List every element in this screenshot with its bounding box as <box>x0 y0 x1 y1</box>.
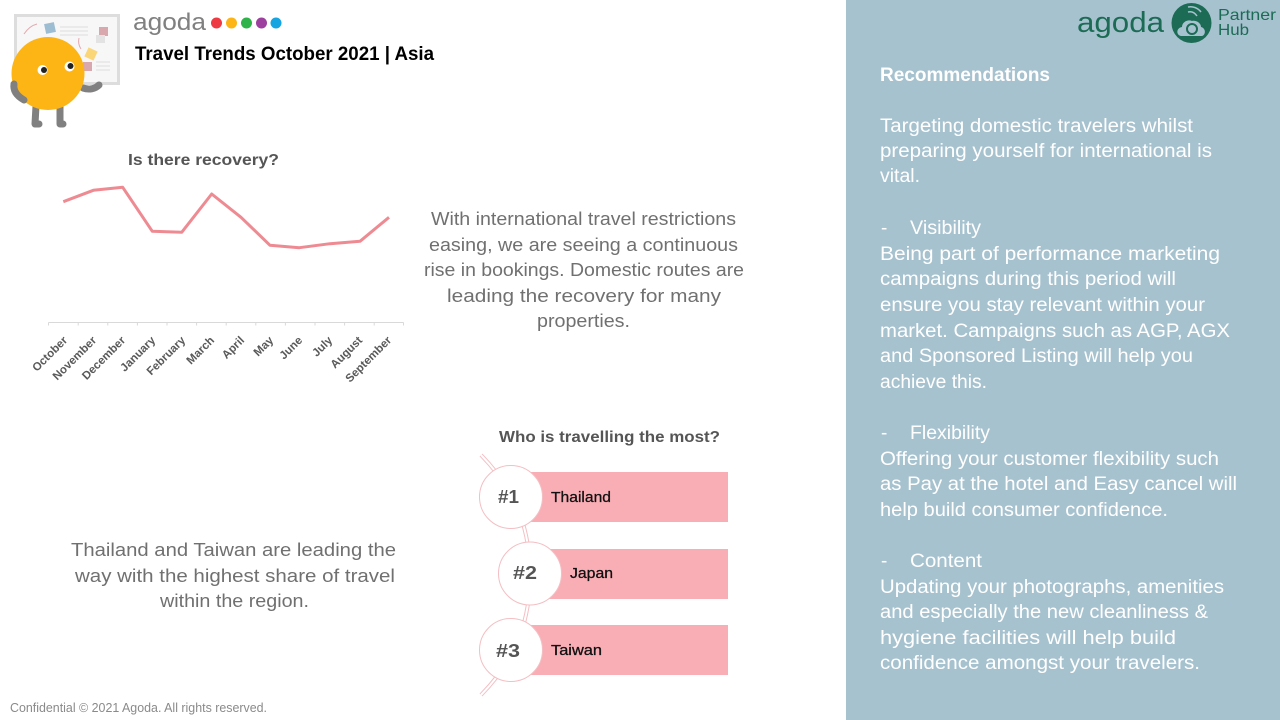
chart heading: is there recovery: Is there recovery? <box>128 152 279 169</box>
text block: flexibility: Offering your customer flexibility such <box>880 449 1219 470</box>
icon: legs <box>35 106 63 124</box>
icon: mascot with board <box>12 16 118 124</box>
axis labels: October <box>30 334 70 374</box>
logo: agoda with dots: agoda <box>133 9 207 36</box>
text block: destinations commentary: way with the highest share of travel <box>74 566 395 586</box>
axis labels: December <box>80 334 128 382</box>
panel: recommendations <box>846 0 1280 720</box>
text block: content: - <box>881 551 887 572</box>
text block: content: and especially the new cleanliness & <box>880 602 1208 623</box>
text block: recovery commentary: properties. <box>537 311 630 331</box>
rank 3: taiwan: #3 <box>496 641 520 661</box>
rank 2: japan: Japan <box>570 565 613 582</box>
text block: content: Content <box>910 551 983 572</box>
axis labels: September <box>344 334 394 385</box>
text block: visibility <box>880 218 1230 393</box>
text block: recovery commentary <box>424 209 744 331</box>
text block: recovery commentary: rise in bookings. Domestic routes are <box>424 260 744 280</box>
rank 1: thailand <box>480 466 728 528</box>
rank 3: taiwan <box>480 618 728 682</box>
chart heading: who is travelling: Who is travelling the most? <box>499 429 720 446</box>
text block: destinations commentary: Thailand and Taiwan are leading the <box>71 540 396 560</box>
text block: intro: preparing yourself for international is <box>880 141 1212 162</box>
text block: visibility: ensure you stay relevant within your <box>880 295 1206 316</box>
text block: recovery commentary: With international travel restrictions <box>431 209 736 229</box>
text block: destinations commentary: within the region. <box>159 591 309 611</box>
logo: agoda partner hub <box>1077 3 1277 43</box>
text block: visibility: Visibility <box>910 218 982 239</box>
chart line <box>63 187 389 248</box>
icon: eyes <box>38 62 74 75</box>
text block: flexibility: help build consumer confidence. <box>880 500 1168 521</box>
rank 2: japan <box>498 542 728 605</box>
icon: partner hub badge <box>1172 3 1212 43</box>
logo: agoda partner hub: Hub <box>1218 22 1249 39</box>
text block: flexibility: - <box>881 423 887 444</box>
text block: flexibility: as Pay at the hotel and Easy cancel will <box>880 474 1237 495</box>
ranking list <box>480 455 728 695</box>
icon: body <box>12 37 84 110</box>
logo: agoda partner hub: Partner <box>1218 7 1277 24</box>
text block: visibility: - <box>881 218 887 239</box>
axis labels: April <box>220 335 247 362</box>
rank 1: thailand: Thailand <box>551 489 611 506</box>
text block: flexibility <box>880 423 1237 521</box>
text block: destinations commentary <box>71 540 396 611</box>
text block: content: Updating your photographs, amenities <box>880 577 1224 598</box>
text block: intro <box>880 116 1212 187</box>
text block: recovery commentary: easing, we are seeing a continuous <box>429 235 738 255</box>
axis labels: June <box>278 335 305 362</box>
logo: agoda partner hub: agoda <box>1077 7 1165 39</box>
axis labels: August <box>329 335 365 371</box>
axis labels: November <box>51 334 99 383</box>
text block: content: hygiene facilities will help build <box>880 628 1176 649</box>
text block: visibility: market. Campaigns such as AGP, AGX <box>880 321 1230 342</box>
text block: visibility: Being part of performance marketing <box>880 244 1220 265</box>
rank 2: japan: #2 <box>513 563 537 583</box>
heading: recommendations: Recommendations <box>880 65 1050 86</box>
axis labels: January <box>118 334 159 374</box>
footer: confidentiality note: Confidential © 2021 Agoda. All rights reserved. <box>10 700 267 715</box>
text block: visibility: and Sponsored Listing will help you <box>880 346 1193 367</box>
text block: visibility: campaigns during this period will <box>880 269 1176 290</box>
title: Travel Trends October 2021 | Asia <box>135 44 434 65</box>
axis labels: March <box>185 335 217 367</box>
text block: content: confidence amongst your travelers. <box>880 653 1200 674</box>
rank 1: thailand: #1 <box>498 487 519 507</box>
axis labels: May <box>252 334 277 359</box>
axis labels: February <box>145 334 189 378</box>
icon: left arm <box>14 84 24 100</box>
axis labels <box>30 334 394 385</box>
icon: right arm <box>83 85 99 89</box>
text block: intro: Targeting domestic travelers whilst <box>880 116 1194 137</box>
text block: flexibility: Flexibility <box>910 423 991 444</box>
text block: recovery commentary: leading the recovery for many <box>447 286 721 306</box>
text block: content <box>880 551 1224 674</box>
text block: visibility: achieve this. <box>880 372 987 393</box>
logo: agoda with dots <box>133 9 282 36</box>
line chart: recovery <box>30 187 403 385</box>
rank 3: taiwan: Taiwan <box>551 642 602 659</box>
axis labels: July <box>310 334 336 359</box>
text block: intro: vital. <box>880 166 920 187</box>
